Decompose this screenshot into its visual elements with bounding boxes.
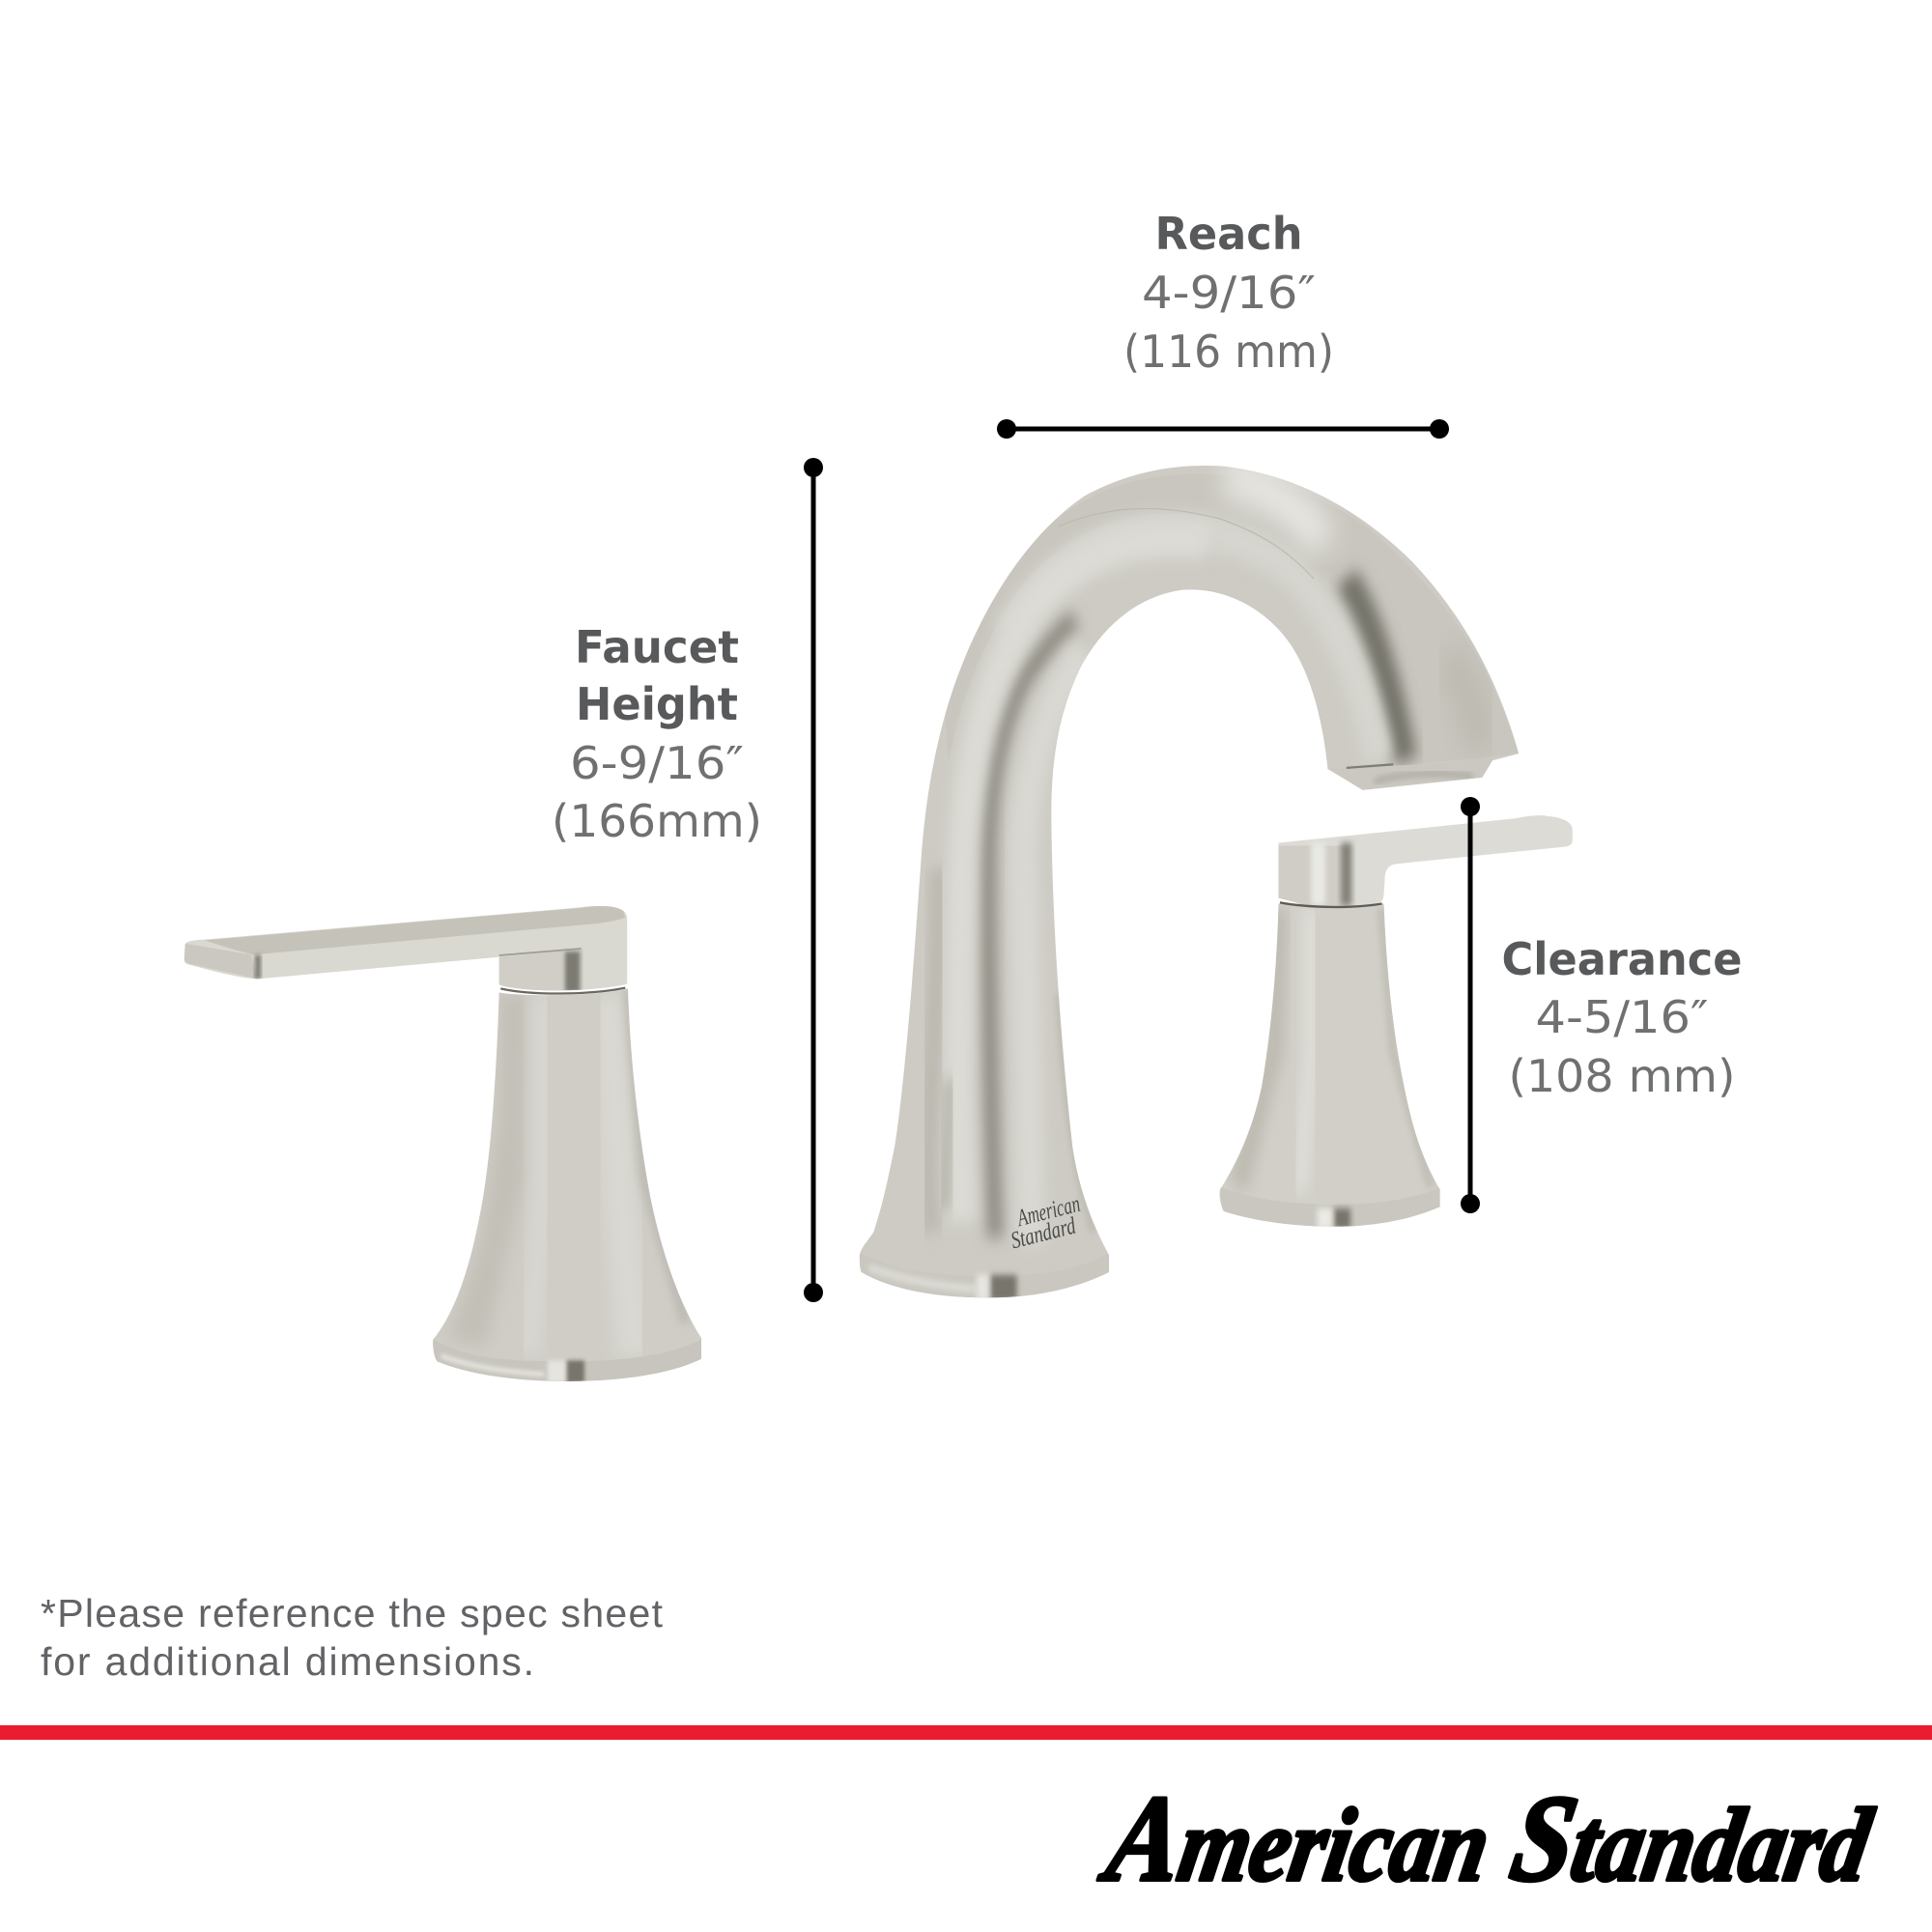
right handle (1215, 811, 1580, 1233)
dimension arrow: clearance (1461, 797, 1480, 1213)
right handle collar gap (1280, 902, 1382, 907)
left handle collar gap (500, 988, 625, 994)
heading: faucet height dimension: (166mm) (552, 795, 762, 847)
heading: reach dimension: 4-9/16″ (1142, 267, 1316, 319)
centre spout (850, 448, 1534, 1312)
dimension arrow: reach (997, 419, 1449, 439)
footnote: for additional dimensions. (41, 1639, 534, 1684)
heading: clearance dimension: (108 mm) (1509, 1050, 1735, 1102)
heading: clearance dimension: Clearance (1501, 933, 1743, 985)
spout aerator (1327, 760, 1492, 790)
heading: faucet height dimension: Height (576, 678, 738, 730)
footnote (41, 1591, 664, 1684)
spout dark core (988, 618, 1075, 1238)
dimension arrow: faucet height (804, 458, 823, 1302)
brand logo (1093, 1770, 1883, 1907)
spout highlights (958, 539, 1206, 1221)
spout base flange (860, 1253, 1109, 1300)
heading: reach dimension: Reach (1155, 208, 1302, 260)
small logo on spout: American (1013, 1191, 1083, 1232)
left handle lever (184, 906, 628, 991)
right handle lever (1271, 811, 1580, 914)
brand logo: American (1093, 1770, 1501, 1907)
small logo on spout: Standard (1009, 1213, 1079, 1254)
spout body (850, 448, 1534, 1312)
spout top ridge (945, 524, 1519, 753)
small logo on spout (1004, 1191, 1088, 1254)
heading: clearance dimension (1501, 933, 1743, 1102)
heading: clearance dimension: 4-5/16″ (1536, 991, 1708, 1043)
heading: reach dimension (1123, 208, 1334, 378)
left handle body (422, 985, 712, 1388)
red divider bar (0, 1725, 1932, 1740)
footnote: *Please reference the spec sheet (41, 1591, 664, 1635)
heading: faucet height dimension: 6-9/16″ (570, 737, 744, 789)
spout outer face shade (1347, 579, 1405, 760)
heading: faucet height dimension (552, 621, 762, 847)
heading: faucet height dimension: Faucet (575, 621, 739, 673)
heading: reach dimension: (116 mm) (1123, 326, 1334, 378)
brand logo: Standard (1502, 1770, 1883, 1907)
left handle (181, 901, 712, 1388)
spout ridge line (1059, 509, 1314, 579)
right handle body (1215, 896, 1449, 1233)
